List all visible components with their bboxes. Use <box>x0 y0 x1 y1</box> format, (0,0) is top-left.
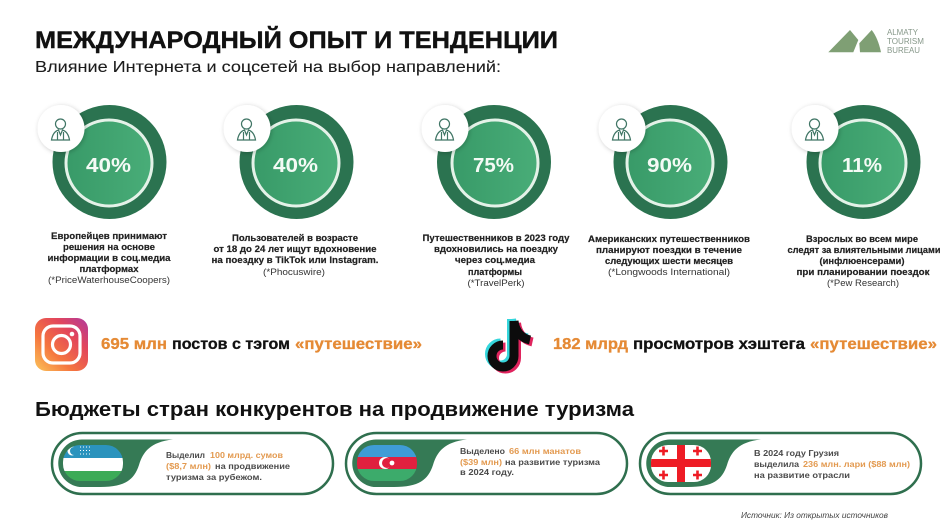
panel: Georgia budget <box>640 433 921 494</box>
stat ring <box>437 105 551 219</box>
caption: (*PriceWaterhouseCoopers) <box>48 275 170 285</box>
Instagram statistic: постов с тэгом <box>172 336 290 353</box>
caption: при планировании поездок <box>796 267 930 277</box>
caption: от 18 до 24 лет ищут вдохновение <box>214 244 376 254</box>
caption: информации в соц.медиа <box>48 253 172 263</box>
stat disc <box>66 120 152 206</box>
icon: person <box>422 105 468 152</box>
TikTok statistic: «путешествие» <box>810 336 937 353</box>
caption: планируют поездки в течение <box>596 245 742 255</box>
panel: stat 40% Europeans <box>38 105 172 285</box>
stat disc <box>452 120 538 206</box>
heading: competitor budgets: Бюджеты стран конкурентов на продвижение туризма <box>35 399 635 421</box>
green swoosh <box>58 440 173 487</box>
stat disc <box>820 120 906 206</box>
title: МЕЖДУНАРОДНЫЙ ОПЫТ И ТЕНДЕНЦИИ <box>35 26 558 54</box>
caption: (*Longwoods International) <box>608 267 730 277</box>
caption: (*Phocuswire) <box>263 267 325 277</box>
text: на продвижение <box>215 461 290 471</box>
text: 66 млн манатов <box>509 446 581 456</box>
caption: вдохновились на поездку <box>434 244 558 254</box>
percentage: 40% <box>86 155 131 177</box>
source note: Источник: Из открытых источников <box>741 511 888 520</box>
text: туризма за рубежом. <box>166 472 262 482</box>
icon: person <box>598 105 646 152</box>
panel: stat 75% travellers 2023 <box>422 105 570 288</box>
caption: Пользователей в возрасте <box>232 233 358 243</box>
flag: Uzbekistan <box>63 445 123 481</box>
green swoosh <box>646 440 761 487</box>
icon: Instagram <box>35 318 88 371</box>
caption: (инфлюенсерами) <box>820 256 904 266</box>
percentage: 11% <box>842 155 882 177</box>
text: 236 млн. лари ($88 млн) <box>803 459 910 469</box>
text: 100 млрд. сумов <box>210 450 283 460</box>
stat disc <box>253 120 339 206</box>
caption <box>788 234 940 288</box>
percentage: 40% <box>273 155 318 177</box>
TikTok statistic <box>553 336 937 353</box>
panel: stat 90% American travellers <box>588 105 750 277</box>
stat ring <box>806 105 920 219</box>
text: в 2024 году. <box>460 467 514 477</box>
caption: Взрослых во всем мире <box>806 234 918 244</box>
caption <box>48 231 172 285</box>
caption <box>212 233 378 277</box>
caption <box>588 234 750 277</box>
green swoosh <box>352 440 467 487</box>
text: Выделено <box>460 446 505 456</box>
text: на развитие туризма <box>505 457 600 467</box>
icon: TikTok <box>490 319 532 369</box>
icon: person <box>792 105 838 152</box>
caption: через соц.медиа <box>455 255 536 265</box>
caption: платформах <box>80 264 138 274</box>
text: Выделил <box>166 450 205 460</box>
panel: Uzbekistan budget <box>52 433 333 494</box>
caption: (*TravelPerk) <box>468 278 524 288</box>
icon: person <box>224 105 270 152</box>
TikTok statistic: просмотров хэштега <box>633 336 805 353</box>
subtitle: Влияние Интернета и соцсетей на выбор направлений: <box>35 59 501 76</box>
Instagram statistic <box>101 336 422 353</box>
caption: Путешественников в 2023 году <box>422 233 570 243</box>
caption: решения на основе <box>63 242 155 252</box>
stat ring <box>52 105 166 219</box>
caption: Европейцев принимают <box>51 231 168 241</box>
caption: следят за влиятельными лицами <box>788 245 940 255</box>
logo: Almaty Tourism Bureau: BUREAU <box>887 46 920 55</box>
text <box>460 446 600 477</box>
stat ring <box>614 105 728 219</box>
pill outline <box>640 433 921 494</box>
text: на развитие отрасли <box>754 470 850 480</box>
pill outline <box>346 433 627 494</box>
caption: Американских путешественников <box>588 234 750 244</box>
Instagram statistic: 695 млн <box>101 336 167 353</box>
text: ($39 млн) <box>460 457 502 467</box>
caption: следующих шести месяцев <box>605 256 733 266</box>
caption: платформы <box>468 267 522 277</box>
icon: person <box>38 105 84 152</box>
text: В 2024 году Грузия <box>754 448 839 458</box>
logo: Almaty Tourism Bureau: ALMATY <box>887 28 919 37</box>
caption: на поездку в TikTok или Instagram. <box>212 255 378 265</box>
panel: stat 40% users 18-24 <box>212 105 378 277</box>
caption <box>422 233 570 288</box>
logo: Almaty Tourism Bureau <box>828 28 924 55</box>
flag: Georgia <box>651 445 711 482</box>
text: ($8,7 млн) <box>166 461 211 471</box>
percentage: 75% <box>473 155 514 177</box>
percentage: 90% <box>647 155 692 177</box>
stat ring <box>240 105 354 219</box>
logo: Almaty Tourism Bureau: TOURISM <box>887 37 924 46</box>
TikTok statistic: 182 млрд <box>553 336 628 353</box>
panel: Azerbaijan budget <box>346 433 627 494</box>
panel: stat 11% adults <box>788 105 940 288</box>
caption: (*Pew Research) <box>827 278 899 288</box>
text: выделила <box>754 459 799 469</box>
text <box>754 448 910 480</box>
text <box>166 450 290 482</box>
stat disc <box>627 120 713 206</box>
flag: Azerbaijan <box>357 445 417 481</box>
pill outline <box>52 433 333 494</box>
Instagram statistic: «путешествие» <box>295 336 422 353</box>
